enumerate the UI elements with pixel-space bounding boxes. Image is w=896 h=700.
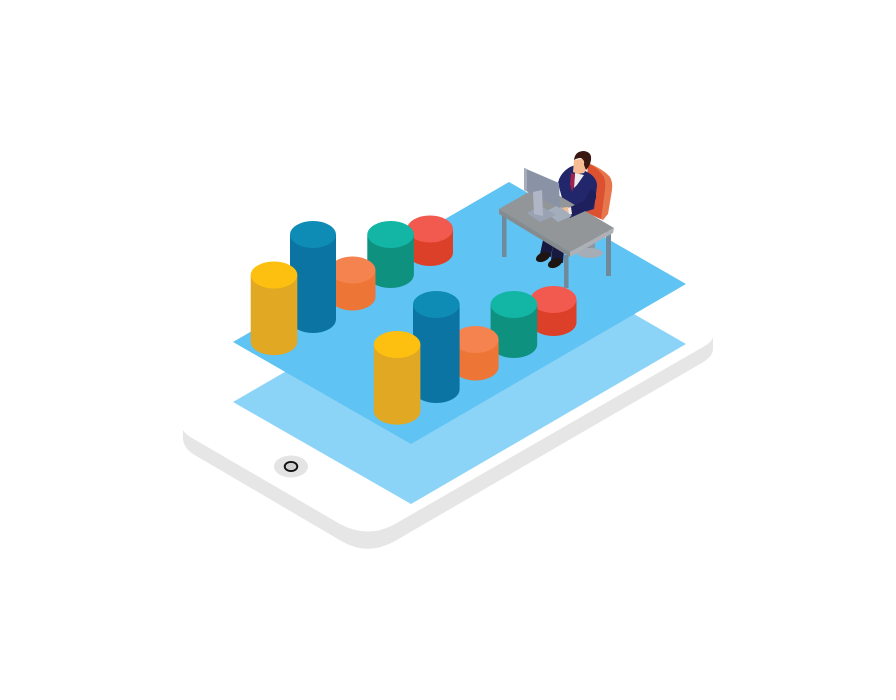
floating data plane xyxy=(233,182,686,444)
man arm xyxy=(560,190,596,218)
blue bar xyxy=(290,221,336,333)
desk scene with businessman xyxy=(499,151,614,288)
shoes xyxy=(534,250,564,270)
yellow bar xyxy=(374,331,420,425)
home button xyxy=(274,456,308,478)
monitor stand xyxy=(533,190,543,216)
phone body xyxy=(183,242,713,549)
monitor base xyxy=(527,206,556,222)
desk xyxy=(499,185,614,288)
phone screen xyxy=(233,242,686,504)
back desk legs xyxy=(502,214,611,276)
red bar xyxy=(530,286,576,336)
red bar xyxy=(407,216,453,266)
face xyxy=(573,158,587,174)
hand xyxy=(560,207,569,216)
cylinder bar chart: group two xyxy=(374,286,576,425)
blue bar xyxy=(413,291,460,403)
computer xyxy=(524,168,572,222)
teal bar xyxy=(491,291,537,358)
teal bar xyxy=(367,221,414,288)
monitor xyxy=(524,168,560,208)
keyboard xyxy=(545,205,572,222)
orange bar xyxy=(330,256,376,310)
yellow bar xyxy=(251,262,297,355)
chair xyxy=(577,163,612,258)
man torso xyxy=(558,151,597,216)
orange bar xyxy=(453,326,499,380)
tie xyxy=(570,173,575,192)
cuff xyxy=(567,207,572,216)
cylinder bar chart: group one xyxy=(251,216,453,355)
front desk leg xyxy=(564,255,568,288)
hair xyxy=(574,151,591,170)
trousers xyxy=(540,240,564,263)
shirt xyxy=(574,173,584,188)
